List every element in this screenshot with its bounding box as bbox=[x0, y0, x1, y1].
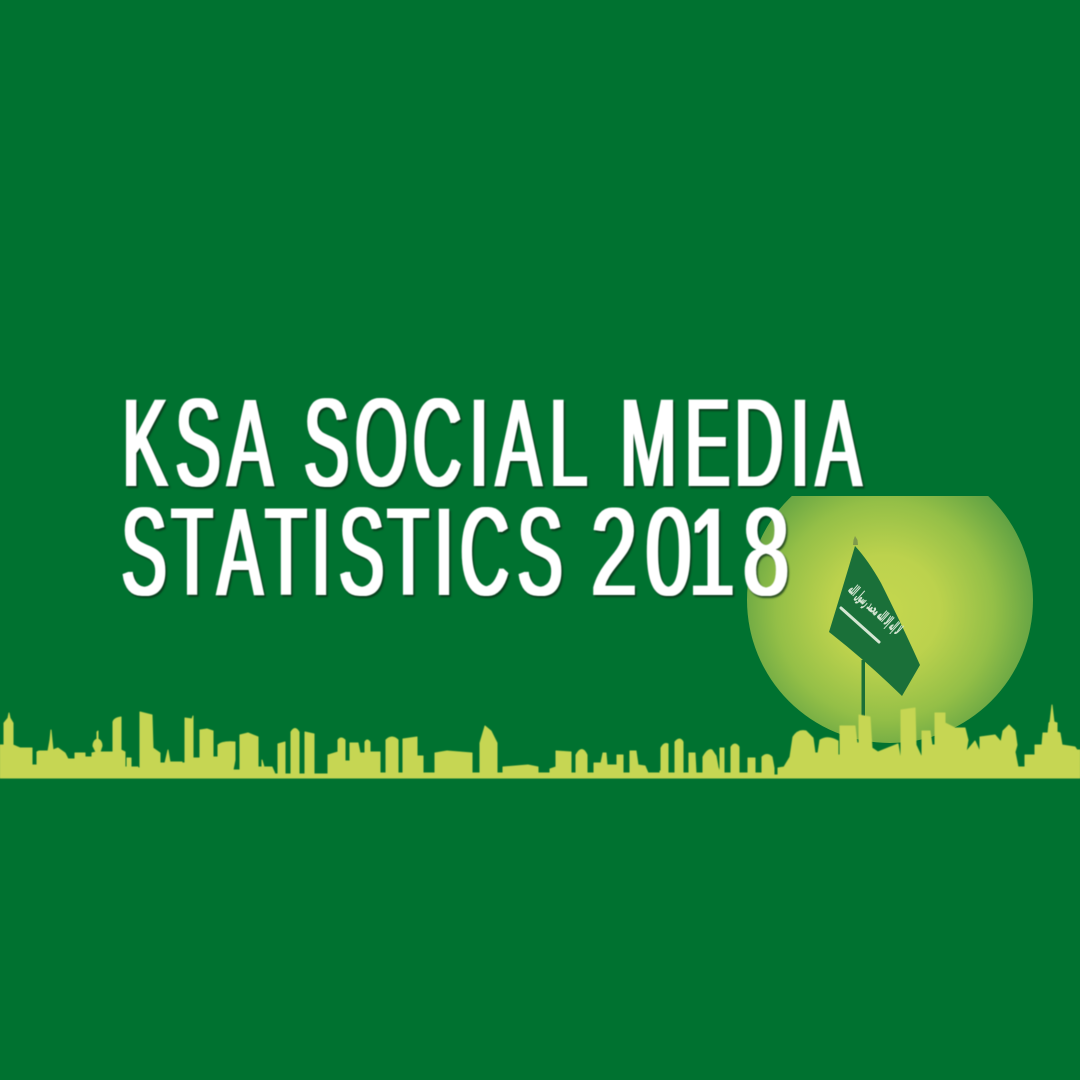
title line 1: KSA SOCIAL MEDIA bbox=[122, 374, 861, 513]
icon: Saudi flag on pole bbox=[829, 536, 920, 716]
flag cloth bbox=[829, 546, 920, 696]
pole finial bbox=[853, 536, 858, 545]
flag pole bbox=[862, 660, 865, 716]
flag sword bbox=[841, 608, 879, 642]
title line 2: 2018 bbox=[591, 483, 789, 622]
title line 2: STATISTICS bbox=[122, 483, 563, 622]
city skyline bbox=[0, 705, 1080, 778]
glowing circle behind flag bbox=[747, 496, 1033, 743]
title line 2 bbox=[122, 483, 789, 622]
title bbox=[122, 374, 861, 622]
infographic canvas bbox=[0, 397, 1080, 780]
infographic canvas: لا إله إلا الله محمد رسول الله bbox=[845, 581, 906, 638]
